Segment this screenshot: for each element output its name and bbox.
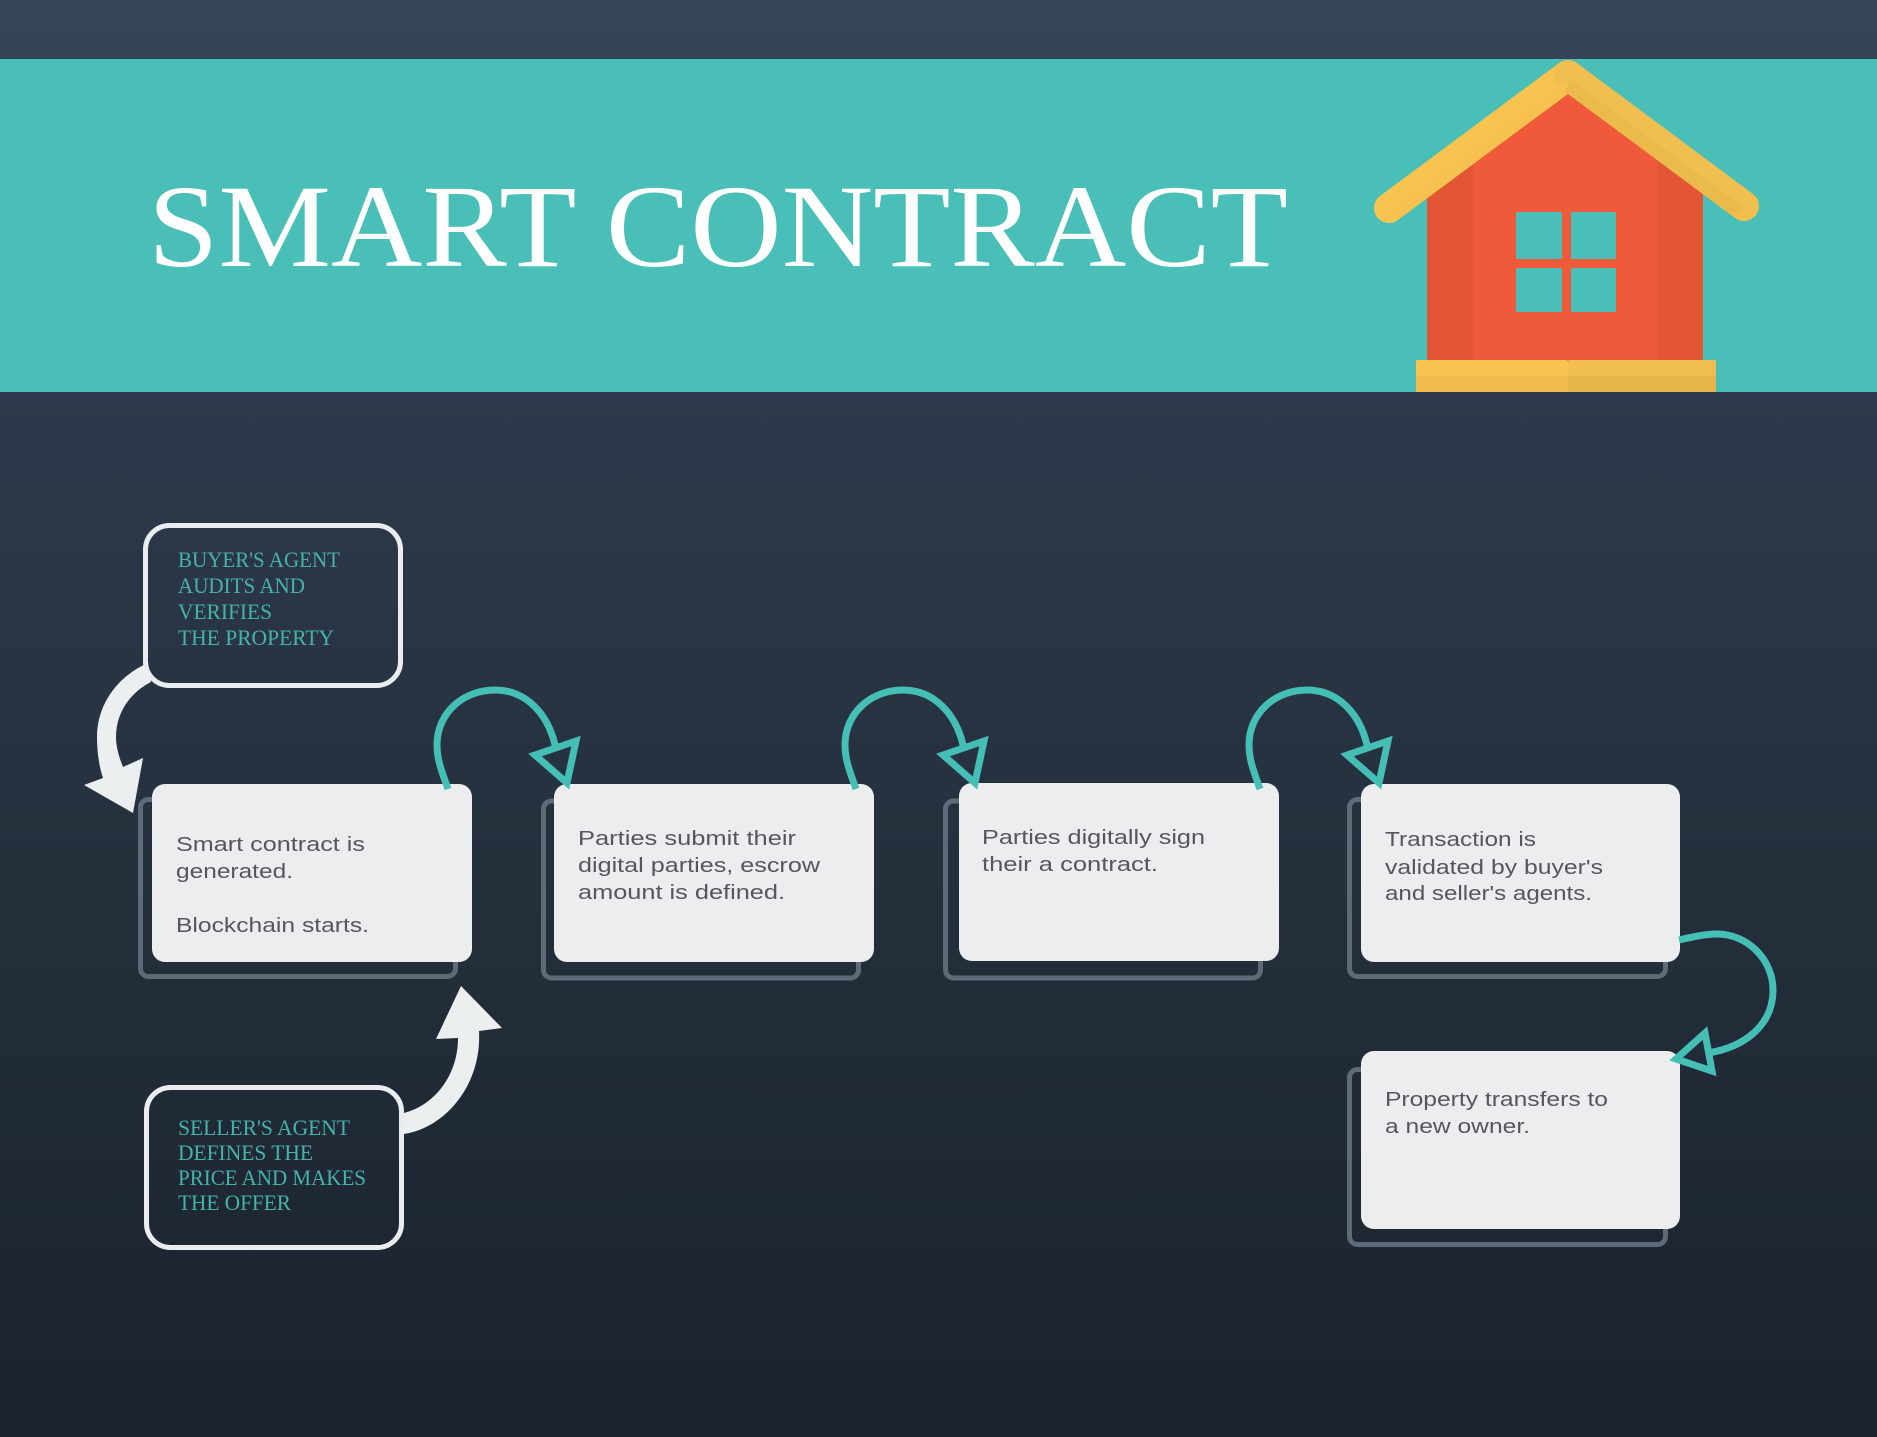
step 1 text: Smart contract is <box>176 834 365 856</box>
arrow: step 2 to step 3 <box>845 690 984 789</box>
buyer's agent text <box>178 547 341 650</box>
step 1 text: Blockchain starts. <box>176 915 369 937</box>
buyer's agent text: THE PROPERTY <box>178 625 334 650</box>
panel: step 5 <box>1350 1051 1680 1244</box>
seller's agent text: SELLER'S AGENT <box>178 1115 351 1140</box>
seller's agent text <box>178 1115 366 1215</box>
step 5 text: Property transfers to <box>1385 1089 1608 1111</box>
panel: seller's agent <box>146 1088 402 1248</box>
icon: house <box>1389 75 1744 392</box>
panel: step 3 <box>946 783 1279 978</box>
step 4 text <box>1385 829 1603 905</box>
buyer's agent text: VERIFIES <box>178 599 272 624</box>
step 2 text <box>578 828 821 904</box>
buyer's agent text: AUDITS AND <box>178 573 305 598</box>
arrow: step 3 to step 4 <box>1249 690 1388 789</box>
arrow: buyer's agent to step 1 <box>84 663 151 813</box>
arrow: step 1 to step 2 <box>437 690 576 789</box>
step 2 text: digital parties, escrow <box>578 855 821 877</box>
step 1 text: generated. <box>176 861 293 883</box>
step 4 text: Transaction is <box>1385 829 1536 851</box>
seller's agent text: PRICE AND MAKES <box>178 1165 366 1190</box>
step 3 text: Parties digitally sign <box>982 827 1205 849</box>
arrow: seller's agent to step 1 <box>404 986 502 1134</box>
step 3 text: their a contract. <box>982 854 1158 876</box>
panel: step 4 <box>1350 784 1680 976</box>
step 4 text: validated by buyer's <box>1385 857 1603 879</box>
step 5 text: a new owner. <box>1385 1116 1530 1138</box>
buyer's agent text: BUYER'S AGENT <box>178 547 341 572</box>
seller's agent text: THE OFFER <box>178 1190 291 1215</box>
panel: buyer's agent <box>146 526 400 686</box>
seller's agent text: DEFINES THE <box>178 1140 313 1165</box>
step 4 text: and seller's agents. <box>1385 883 1592 905</box>
step 2 text: Parties submit their <box>578 828 796 850</box>
step 5 text <box>1385 1089 1608 1138</box>
panel: step 2 <box>544 784 874 978</box>
title: SMART CONTRACT <box>148 161 1288 292</box>
step 2 text: amount is defined. <box>578 882 785 904</box>
step 1 text <box>176 834 369 937</box>
step 3 text <box>982 827 1205 876</box>
arrow: step 4 to step 5 <box>1676 934 1773 1071</box>
header banner <box>0 59 1877 392</box>
panel: step 1 <box>140 784 472 976</box>
